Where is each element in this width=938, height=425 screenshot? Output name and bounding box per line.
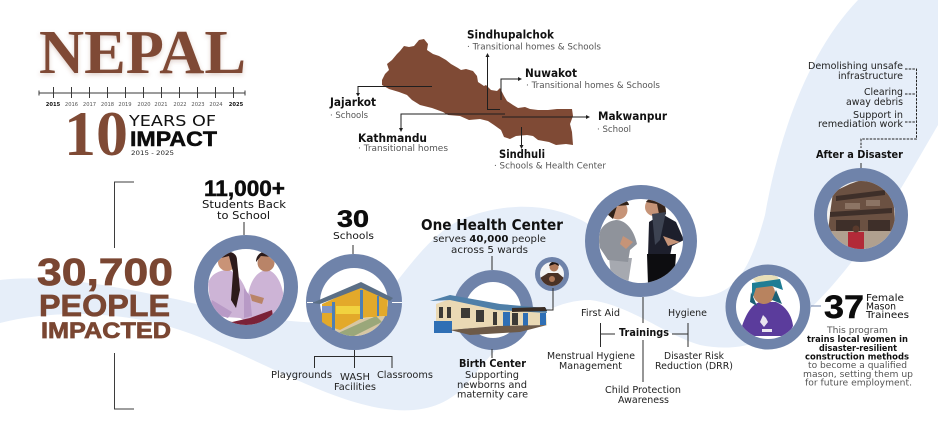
school facilities tree [271,350,433,393]
text: mason program description: construction methods [805,352,909,362]
after a disaster list: away debris [846,97,903,108]
trainings tree: First Aid [581,308,620,319]
photo circle: school building [306,254,402,350]
heading: 10 years of impact: 2015 - 2025 [131,149,174,157]
school facilities tree: Classrooms [377,370,433,381]
after a disaster list: infrastructure [838,71,903,82]
dashed connector [861,69,916,148]
photo circle: health center building [430,270,547,350]
label: Nuwakot: Nuwakot [525,66,577,80]
text: mason program description: This program [826,326,888,336]
trainings tree: Awareness [618,395,669,406]
stat: 30 schools [333,206,374,242]
label: Sindhupalchok: Sindhupalchok [467,28,554,42]
text: mason program description: for future employment. [805,378,912,388]
timeline 2015-2025: 2019 [118,102,132,108]
timeline 2015-2025: 2021 [154,102,168,108]
timeline 2015-2025: 2016 [65,102,78,108]
heading: 10 years of impact: 10 [64,99,128,169]
timeline 2015-2025: 2020 [137,102,151,108]
stat: 37 female mason trainees: Female [866,293,904,304]
stat: 37 female mason trainees [824,289,909,325]
stat: one health center: One Health Center [421,216,563,234]
trainings tree: Child Protection [605,385,681,396]
text: mason program description: disaster-resilient [819,344,898,354]
timeline 2015-2025: 2024 [209,102,223,108]
trainings tree [547,297,733,406]
timeline 2015-2025: 2025 [229,102,244,108]
stat: 11,000+ students: 11,000+ [204,176,285,201]
heading: after a disaster: After a Disaster [816,149,904,161]
stat: 11,000+ students: to School [217,209,270,222]
trainings tree: Trainings [619,327,669,339]
label: Sindhuli [494,147,606,172]
stat: 30,700 people impacted: 30,700 [37,252,173,294]
trainings tree: Management [559,361,622,372]
label: Jajarkot: Jajarkot [329,95,376,109]
photo circle: female mason [726,264,810,350]
stat: 30,700 people impacted [37,252,173,343]
label: Makwanpur [597,109,667,135]
timeline 2015-2025: 2022 [173,102,187,108]
text: birth center: Supporting [465,370,519,381]
stat: one health center [421,216,563,256]
text: mason program description: trains local women in [807,335,908,345]
timeline 2015-2025 [39,87,245,108]
timeline 2015-2025: 2015 [46,102,61,108]
label: Jajarkot [329,95,376,121]
stat: 37 female mason trainees: Trainees [865,310,909,321]
school facilities tree: Playgrounds [271,370,332,381]
trainings tree: Disaster Risk [664,351,724,362]
school facilities tree: Facilities [334,382,376,393]
text: mason program description: mason, setting them up [803,370,913,380]
label: Sindhuli: · Schools & Health Center [494,162,606,172]
stat: 11,000+ students: Students Back [202,198,287,211]
label: Sindhupalchok: · Transitional homes & Schools [467,42,601,52]
stat: 30 schools: Schools [333,231,374,242]
label: Nuwakot: · Transitional homes & Schools [526,81,660,91]
stat: one health center: serves 40,000 people [433,234,546,245]
stat: 30 schools: 30 [337,206,369,233]
after a disaster list: Demolishing unsafe [808,61,903,72]
timeline 2015-2025: 2017 [83,102,96,108]
bracket around people impacted [114,182,134,409]
photo circle: students [194,235,298,339]
after a disaster list: Support in [853,110,903,121]
trainings tree: Menstrual Hygiene [547,351,635,362]
after a disaster list: remediation work [818,119,904,130]
text: mason program description [803,326,913,388]
photo circle: damaged building [814,168,908,262]
label: Jajarkot: · Schools [330,111,368,121]
photo circle: training [585,185,697,297]
heading: 10 years of impact: YEARS OF [128,112,216,130]
after a disaster list: Clearing [864,87,903,98]
label: Kathmandu: Kathmandu [358,131,427,145]
after a disaster list [808,61,904,130]
timeline 2015-2025: 2023 [191,102,205,108]
map callout lines and arrows [356,53,590,149]
heading: 10 years of impact: IMPACT [130,128,217,151]
map of Nepal [382,39,573,145]
stat: 30,700 people impacted: IMPACTED [41,318,171,343]
school facilities tree: WASH [340,372,370,383]
text: birth center: maternity care [457,390,528,400]
trainings tree: Hygiene [668,308,707,319]
stat: one health center: across 5 wards [451,245,528,256]
text: birth center [457,349,528,400]
small photo circle: mother and baby [535,257,569,291]
stat: 37 female mason trainees: 37 [824,289,864,325]
stat: 37 female mason trainees: Mason [866,302,896,312]
trainings tree: Reduction (DRR) [655,361,733,372]
stat: 30,700 people impacted: PEOPLE [39,288,170,323]
stat: 11,000+ students [202,176,287,222]
label: Kathmandu: · Transitional homes [358,144,448,154]
label: Kathmandu [358,131,448,154]
timeline 2015-2025: 2018 [101,102,114,108]
text: birth center: Birth Center [459,358,527,370]
label: Sindhupalchok [467,28,601,52]
text: birth center: newborns and [457,380,527,391]
label: Nuwakot [525,66,660,91]
text: mason program description: to become a qualified [808,361,907,371]
label: Makwanpur: · School [597,125,631,135]
heading: 10 years of impact [64,99,217,169]
label: Makwanpur: Makwanpur [598,109,667,123]
label: Sindhuli: Sindhuli [499,147,545,161]
title: NEPAL: NEPAL [39,19,246,87]
